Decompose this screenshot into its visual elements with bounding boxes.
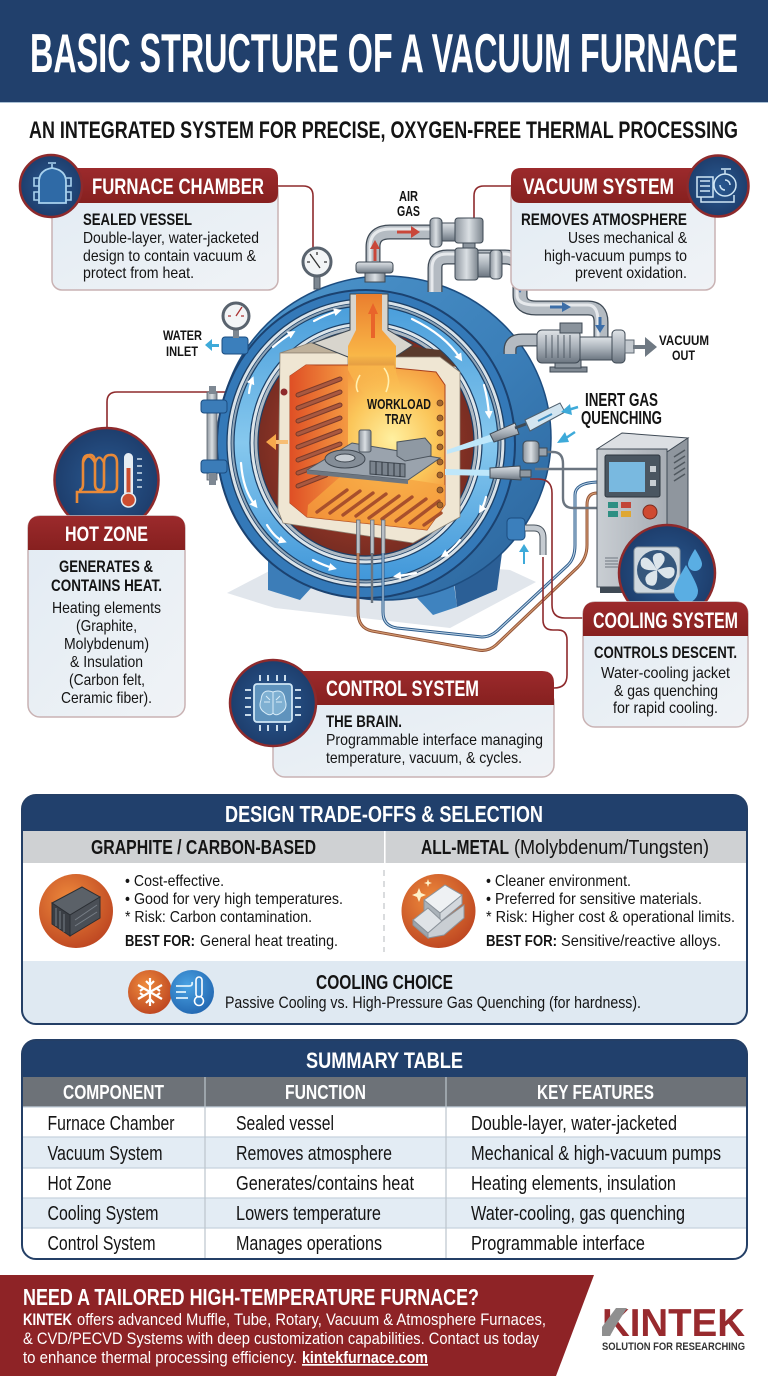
label: water inlet: INLET <box>166 343 198 359</box>
flow arrows <box>397 230 412 234</box>
table header: FUNCTION <box>285 1082 366 1104</box>
row: hot zone: Generates/contains heat <box>236 1173 414 1195</box>
footer text <box>23 1310 546 1367</box>
label: vacuum out: OUT <box>672 347 695 363</box>
furnace vessel <box>201 276 551 600</box>
thermocouple probes <box>356 520 385 554</box>
label: workload tray <box>367 396 431 428</box>
cooling choice text <box>225 972 641 1012</box>
graphite text: • Good for very high temperatures. <box>125 891 343 908</box>
row: cooling system <box>48 1203 685 1225</box>
pressure gauge top <box>303 248 331 289</box>
row: furnace chamber: Sealed vessel <box>236 1113 334 1135</box>
icon: chip with brain <box>230 660 316 746</box>
footer text: kintekfurnace.com <box>302 1348 428 1367</box>
label: air gas: GAS <box>397 203 420 220</box>
text block: temperature, vacuum, & cycles. <box>326 750 522 767</box>
label: air gas <box>397 188 420 220</box>
label: inert gas quenching: INERT GAS <box>585 390 658 410</box>
row: control system: Manages operations <box>236 1233 382 1255</box>
text block <box>83 210 259 282</box>
row: furnace chamber: Furnace Chamber <box>48 1113 175 1135</box>
cooling choice text: Passive Cooling vs. High-Pressure Gas Quenching (for hardness). <box>225 994 641 1012</box>
cyan inlet arrow <box>205 339 219 351</box>
icon: coil and thermometer <box>54 428 158 532</box>
row: vacuum system <box>48 1143 721 1165</box>
vessel body <box>219 276 551 600</box>
icon: fan and water drop <box>619 525 715 621</box>
row: furnace chamber <box>48 1113 677 1135</box>
graphite text <box>125 873 343 950</box>
pump inlet pipe <box>510 340 540 354</box>
row: hot zone: Heating elements, insulation <box>471 1173 676 1195</box>
row: control system <box>48 1233 645 1255</box>
label: water inlet <box>163 327 202 359</box>
vacuum out arrow <box>633 337 657 357</box>
row: furnace chamber: Double-layer, water-jacketed <box>471 1113 677 1135</box>
side clamp <box>201 386 227 485</box>
text block: protect from heat. <box>83 265 194 282</box>
blue cable <box>383 482 597 637</box>
side fitting <box>523 441 539 463</box>
text block <box>594 643 737 717</box>
table header: KEY FEATURES <box>537 1082 654 1104</box>
footer text: to enhance thermal processing efficiency. <box>23 1348 297 1367</box>
row: hot zone <box>48 1173 676 1195</box>
vacuum pipe <box>435 257 601 337</box>
table header: COMPONENT <box>63 1082 164 1104</box>
connector lines to callouts <box>107 186 511 428</box>
text block <box>51 558 162 707</box>
column heading: all-metal <box>421 837 709 859</box>
label: water inlet: WATER <box>163 327 202 343</box>
text block: Ceramic fiber). <box>61 690 152 707</box>
heating elements left <box>298 379 340 486</box>
text block: CONTAINS HEAT. <box>51 577 162 595</box>
insulation <box>278 353 460 543</box>
gas arrows <box>568 407 578 410</box>
row: control system: Programmable interface <box>471 1233 645 1255</box>
header banner <box>0 0 768 103</box>
label: vacuum out: VACUUM <box>659 332 709 348</box>
all-metal text: • Cleaner environment. <box>486 873 631 890</box>
flanges and valves <box>430 218 442 247</box>
text block: GENERATES & <box>59 558 153 576</box>
column heading: all-metal: ALL-METAL <box>421 837 509 859</box>
furnace feet <box>268 553 502 615</box>
panel: vacuum system <box>511 156 748 290</box>
label: workload tray: WORKLOAD <box>367 396 431 413</box>
upper gas tube <box>525 403 565 431</box>
heading: DESIGN TRADE-OFFS & SELECTION <box>225 801 543 827</box>
text block: (Carbon felt, <box>69 672 145 689</box>
all-metal text: • Preferred for sensitive materials. <box>486 891 702 908</box>
icon: graphite block <box>39 874 113 948</box>
label: workload tray: TRAY <box>385 411 412 428</box>
label: inert gas quenching: QUENCHING <box>581 408 662 428</box>
graphite text: • Cost-effective. <box>125 873 224 890</box>
floor <box>307 470 445 530</box>
table header <box>63 1082 654 1104</box>
grey cables <box>372 452 597 603</box>
footer heading: NEED A TAILORED HIGH-TEMPERATURE FURNACE? <box>23 1284 479 1310</box>
row: control system: Control System <box>48 1233 156 1255</box>
pipes <box>356 218 605 354</box>
footer text: offers advanced Muffle, Tube, Rotary, Vacuum & Atmosphere Furnaces, <box>77 1310 546 1329</box>
footer text: & CVD/PECVD Systems with deep customization capabilities. Contact us today <box>23 1329 539 1348</box>
heading: CONTROL SYSTEM <box>326 676 479 701</box>
label: air gas: AIR <box>399 188 418 205</box>
vacuum pump <box>537 323 657 372</box>
floor shadow <box>227 555 536 628</box>
column heading: graphite: GRAPHITE / CARBON-BASED <box>91 837 316 859</box>
hot zone callout dot <box>280 388 288 396</box>
flame arrow <box>368 303 378 338</box>
panel: cooling system <box>583 525 748 727</box>
logo: kintek: SOLUTION FOR RESEARCHING <box>602 1341 745 1353</box>
label: inert gas quenching <box>581 390 662 428</box>
water jacket channel <box>234 306 498 580</box>
heating elements floor <box>317 490 441 525</box>
heading: FURNACE CHAMBER <box>92 174 264 199</box>
text block: Uses mechanical & <box>568 230 687 247</box>
hot zone cutaway <box>266 294 494 543</box>
graphite text: BEST FOR: <box>125 933 195 950</box>
panel: summary table <box>22 1040 747 1259</box>
text block: prevent oxidation. <box>575 265 687 282</box>
panel: hot zone <box>28 428 185 717</box>
label: vacuum out <box>659 332 709 363</box>
heat arrow <box>273 440 288 444</box>
cooling choice text: COOLING CHOICE <box>316 972 453 994</box>
control cabinet <box>597 433 688 593</box>
row: vacuum system: Removes atmosphere <box>236 1143 392 1165</box>
gas pipe <box>373 232 432 264</box>
text block: high-vacuum pumps to <box>544 248 687 265</box>
water flow arrows <box>241 311 489 576</box>
heading: HOT ZONE <box>65 522 148 546</box>
insulation top faces <box>280 343 358 353</box>
row: cooling system: Lowers temperature <box>236 1203 381 1225</box>
icon: snowflake and thermometer <box>128 970 214 1014</box>
footer text: KINTEK <box>23 1310 73 1329</box>
text block <box>326 712 543 767</box>
graphite text: * Risk: Carbon contamination. <box>125 909 312 926</box>
heading: VACUUM SYSTEM <box>523 174 674 199</box>
row: cooling system: Cooling System <box>48 1203 158 1225</box>
flue <box>313 294 413 357</box>
cabinet screen <box>605 455 660 497</box>
text block: & Insulation <box>70 654 143 671</box>
text block: for rapid cooling. <box>613 700 718 717</box>
row: hot zone: Hot Zone <box>48 1173 112 1195</box>
cyan outlet arrow <box>519 544 529 564</box>
icon: vacuum pump <box>688 156 748 216</box>
text block: Molybdenum) <box>64 636 149 653</box>
heading: SUMMARY TABLE <box>306 1048 463 1073</box>
callout connectors lower <box>530 479 583 688</box>
all-metal text: * Risk: Higher cost & operational limits. <box>486 909 735 926</box>
quench nozzles <box>490 403 578 480</box>
text block: Water-cooling jacket <box>601 665 730 682</box>
text block: REMOVES ATMOSPHERE <box>521 210 687 229</box>
water outlet pipe <box>507 518 543 564</box>
icon: metal ingots <box>402 874 476 948</box>
quench gas jets <box>445 434 494 476</box>
row: cooling system: Water-cooling, gas quenching <box>471 1203 685 1225</box>
text block: (Graphite, <box>76 618 137 635</box>
row: vacuum system: Vacuum System <box>48 1143 162 1165</box>
cables <box>358 452 597 650</box>
lower nozzle <box>490 466 521 480</box>
all-metal text: Sensitive/reactive alloys. <box>561 933 721 950</box>
workload tray <box>307 430 440 484</box>
panel: furnace chamber <box>20 155 278 290</box>
left wall <box>290 365 348 517</box>
column heading: all-metal: (Molybdenum/Tungsten) <box>514 837 709 859</box>
brown cable <box>358 493 597 650</box>
icon: furnace chamber <box>20 155 82 217</box>
panel: control system <box>230 660 554 777</box>
text block: Double-layer, water-jacketed <box>83 230 259 247</box>
right wall elements <box>437 400 443 508</box>
row: vacuum system: Mechanical & high-vacuum pumps <box>471 1143 721 1165</box>
text block: & gas quenching <box>614 683 718 700</box>
front flange ring <box>217 290 515 598</box>
text block: SEALED VESSEL <box>83 210 192 229</box>
all-metal text: BEST FOR: <box>486 933 557 950</box>
text block: Programmable interface managing <box>326 732 543 749</box>
flame <box>348 294 404 405</box>
oven interior <box>290 365 445 530</box>
panel: design trade-offs <box>22 795 747 1024</box>
text block: THE BRAIN. <box>326 712 402 731</box>
graphite text: General heat treating. <box>200 933 338 950</box>
footer banner <box>0 1275 594 1376</box>
cabinet buttons <box>608 502 657 519</box>
text block <box>521 210 687 282</box>
text block: design to contain vacuum & <box>83 248 256 265</box>
text block: Heating elements <box>52 600 161 617</box>
logo: kintek: KINTEK <box>602 1302 745 1345</box>
water inlet pipe and gauge <box>205 303 249 354</box>
all-metal text <box>486 873 735 950</box>
